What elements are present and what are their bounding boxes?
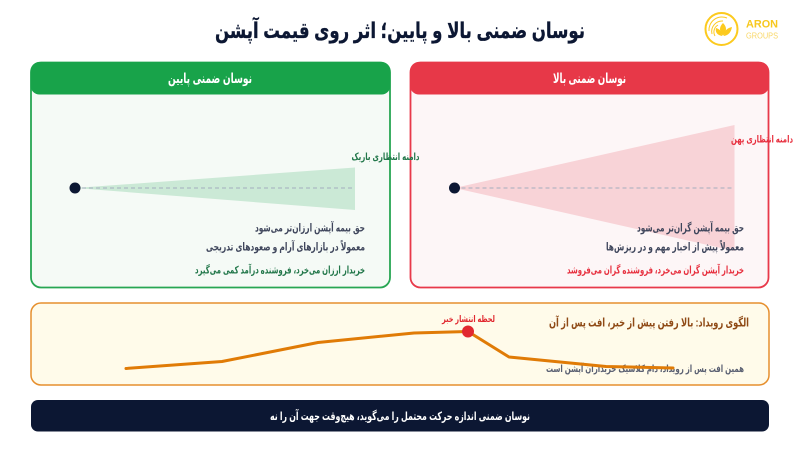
icon: logo emblem [706,13,738,45]
chart: narrow expected range cone [70,168,355,210]
text: low conclusion: خریدار ارزان می‌خرد، فروشنده درآمد کمی می‌گیرد [195,264,365,276]
label: narrow range: دامنه انتظاری باریک [352,152,420,163]
logo: Aron Groups [706,13,778,45]
chart: price line [126,332,673,368]
panel heading: high [410,62,769,94]
logo subtext: GROUPS [746,30,778,40]
title: نوسان ضمنی بالا و پایین؛ اثر روی قیمت آپشن [215,16,585,44]
logo wordmark: ARON [746,18,778,30]
text: low premium: حق بیمه آپشن ارزان‌تر می‌شود [255,220,365,234]
panel: low implied volatility [30,62,390,288]
banner: conclusion: نوسان ضمنی اندازه حرکت محتمل را می‌گوید، هیچ‌وقت جهت آن را نه [270,409,530,424]
panel heading: low: نوسان ضمنی پایین [168,71,252,86]
panel heading: low [30,62,390,94]
chart: wide expected range cone [449,125,734,251]
panel: event pattern [31,303,769,385]
panel: high implied volatility [410,62,769,288]
text: low timing: معمولاً در بازارهای آرام و صعودهای تدریجی [206,239,365,254]
marker: news moment [462,326,474,338]
text: high premium: حق بیمه آپشن گران‌تر می‌شود [637,220,744,234]
banner: conclusion [31,400,769,432]
label: news moment: لحظه انتشار خبر [441,314,495,325]
panel heading: high: نوسان ضمنی بالا [553,71,626,86]
